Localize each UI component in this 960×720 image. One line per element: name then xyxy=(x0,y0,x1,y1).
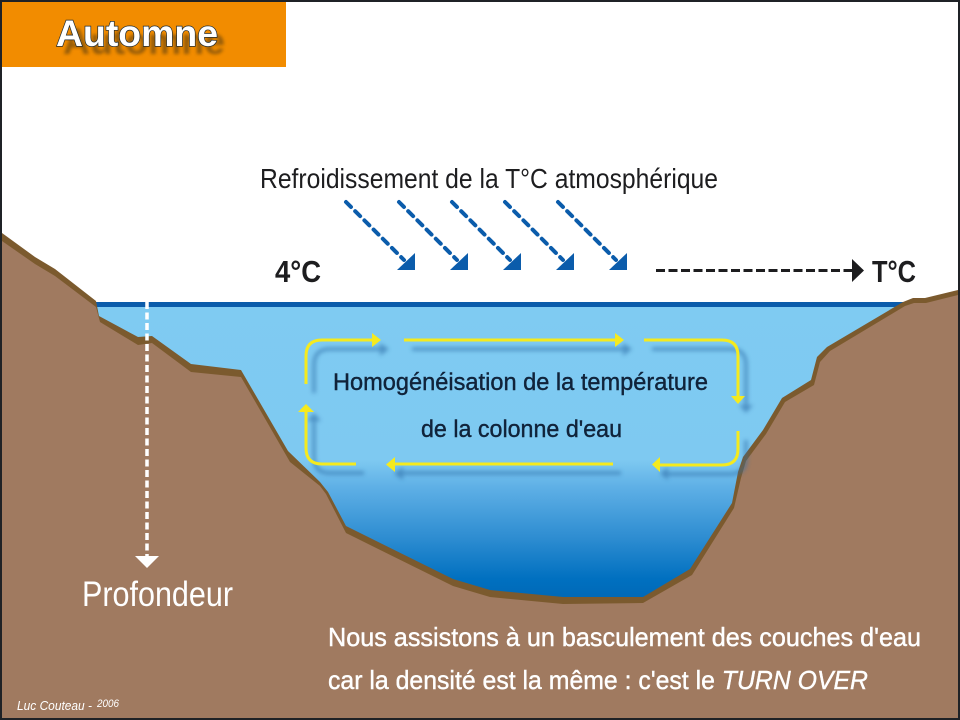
terrain xyxy=(2,241,958,718)
text: homogenisation: Homogénéisation de la température xyxy=(333,369,708,396)
text: turn over explanation: car la densité est la même : c'est le TURN OVER xyxy=(328,665,868,695)
terrain edge xyxy=(2,233,958,718)
text: homogenisation: de la colonne d'eau xyxy=(421,416,622,443)
title shadow: Automne xyxy=(63,21,225,62)
circulation arrows xyxy=(298,333,745,472)
credit: Luc Couteau - xyxy=(17,698,93,713)
credit: 2006 xyxy=(96,698,120,710)
text: turn over explanation xyxy=(328,622,921,695)
title banner xyxy=(2,2,286,67)
label: depth: Profondeur xyxy=(82,575,233,614)
label: T°C: T°C xyxy=(872,254,916,289)
temperature axis arrow xyxy=(656,259,864,282)
heading: atmospheric cooling: Refroidissement de la T°C atmosphérique xyxy=(260,163,718,194)
text: turn over explanation: Nous assistons à un basculement des couches d'eau xyxy=(328,622,921,652)
water body xyxy=(96,302,905,600)
circulation arrows shadow xyxy=(307,343,753,480)
title: Automne xyxy=(56,13,218,54)
label: 4°C: 4°C xyxy=(275,254,321,289)
cooling arrows xyxy=(346,202,627,270)
depth axis arrow xyxy=(135,302,159,568)
water surface line xyxy=(96,302,906,307)
text: homogenisation xyxy=(333,369,708,443)
